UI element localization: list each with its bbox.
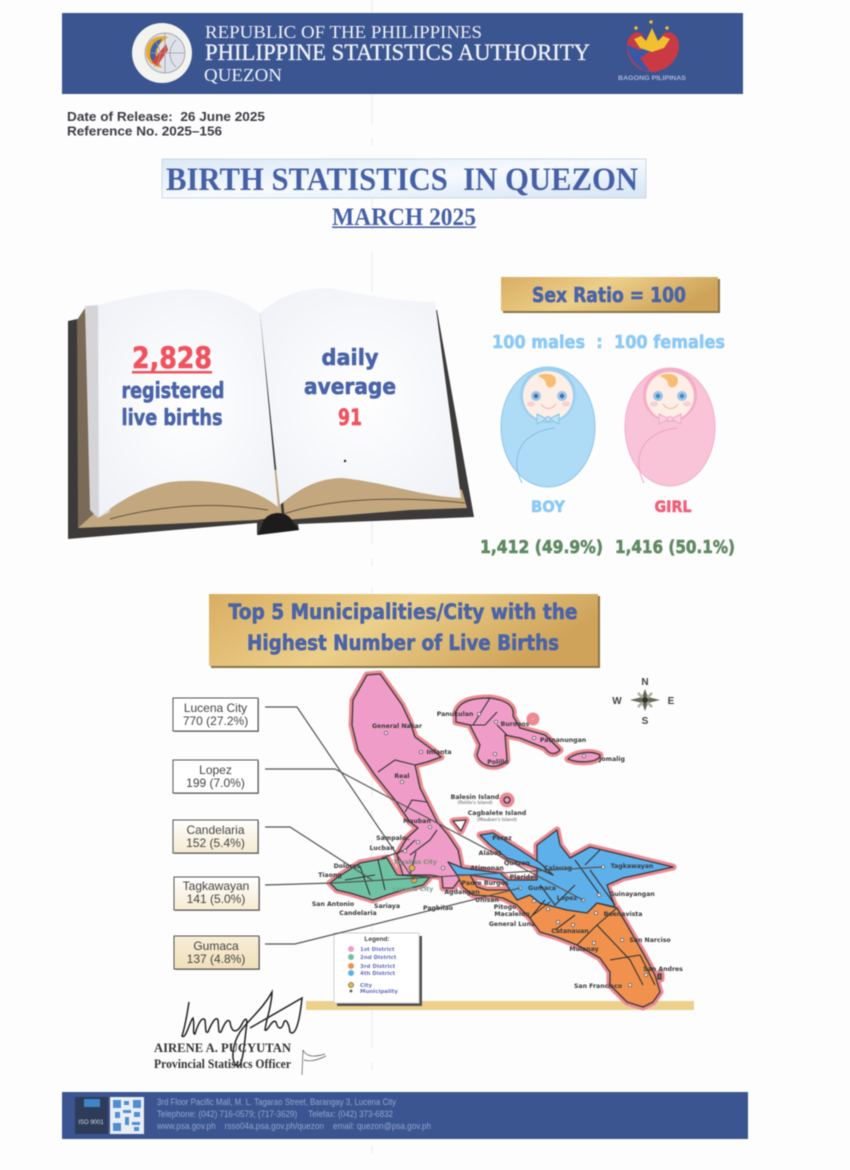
right page stats bbox=[304, 346, 396, 431]
signatory bbox=[154, 992, 326, 1075]
map place labels: south: Plaridel bbox=[510, 874, 536, 881]
signatory: AIRENE A. PUCYUTAN bbox=[154, 1040, 292, 1055]
map place labels: north: General Nakar bbox=[372, 723, 423, 730]
callout: Gumaca: 137 (4.8%) bbox=[187, 952, 245, 966]
callout: Candelaria: Candelaria bbox=[186, 823, 245, 837]
right page bbox=[260, 288, 461, 505]
map place labels: south: Gumaca bbox=[528, 885, 556, 892]
right page stats: daily bbox=[322, 346, 378, 371]
map place labels: south: Tagkawayan bbox=[611, 863, 653, 870]
sex ratio banner bbox=[501, 277, 720, 313]
icon: ISO certification badge bbox=[75, 1097, 108, 1134]
map place labels: north: Panukulan bbox=[437, 711, 473, 718]
footer band bbox=[62, 1092, 748, 1139]
map place labels: south: Pitogo bbox=[494, 904, 516, 911]
map legend: 3rd District bbox=[360, 964, 396, 970]
boy count: 1,412 (49.9%) bbox=[480, 537, 603, 558]
label: boy: BOY bbox=[531, 497, 565, 516]
map place labels: north: Polillo bbox=[487, 759, 509, 766]
header text: QUEZON bbox=[204, 65, 282, 85]
map place labels: south: Dolores bbox=[334, 863, 361, 870]
map of Quezon province bbox=[306, 674, 694, 1010]
map base: districts bbox=[330, 674, 673, 1007]
icon: compass rose: W bbox=[612, 696, 622, 707]
footer contact text bbox=[156, 1097, 431, 1131]
left page bbox=[85, 305, 110, 518]
spine bbox=[258, 513, 299, 535]
callout: Tagkawayan: 141 (5.0%) bbox=[187, 892, 245, 906]
callout: Candelaria: 152 (5.4%) bbox=[186, 836, 245, 850]
map place labels: south: Lucena City bbox=[393, 886, 433, 893]
map place labels: south: San Narciso bbox=[629, 937, 671, 944]
callout: Lopez bbox=[173, 760, 259, 794]
map place labels: south: San Francisco bbox=[574, 983, 622, 990]
callout: Lucena City: Lucena City bbox=[184, 701, 247, 715]
callout: Lopez: Lopez bbox=[199, 763, 232, 777]
icon: Bagong Pilipinas logo bbox=[618, 20, 687, 82]
map place labels: north: Mauban bbox=[403, 818, 431, 825]
header text: PHILIPPINE STATISTICS AUTHORITY bbox=[205, 40, 590, 65]
map legend bbox=[334, 933, 422, 1006]
map place labels: north: Infanta bbox=[426, 749, 452, 756]
top 5 heading: Top 5 Municipalities/City with the bbox=[228, 600, 578, 624]
map place labels: south: Lucban bbox=[369, 845, 395, 852]
release date and reference number: Reference No. 2025–156 bbox=[67, 124, 222, 138]
map place labels: south: Quezon bbox=[504, 860, 530, 867]
header text: REPUBLIC OF THE PHILIPPINES bbox=[205, 22, 482, 42]
icon: ISO certification badge: ISO 9001 bbox=[78, 1120, 104, 1126]
sex ratio banner: Sex Ratio = 100 bbox=[532, 283, 686, 307]
map place labels: south: General Luna bbox=[489, 921, 535, 928]
map place labels: south: Agdangan bbox=[444, 889, 480, 896]
icon: QR code bbox=[110, 1097, 144, 1134]
map place labels: north: Jomalig bbox=[598, 756, 625, 763]
icon: PSA seal bbox=[132, 23, 192, 83]
icon: compass rose: S bbox=[642, 716, 649, 727]
map place labels: south: Padre Burgos bbox=[462, 880, 509, 887]
map place labels: south: Guinayangan bbox=[609, 891, 655, 898]
subtitle: month: MARCH 2025 bbox=[332, 204, 476, 231]
left page stats: live births bbox=[122, 406, 222, 431]
title: BIRTH STATISTICS IN QUEZON bbox=[166, 162, 638, 198]
map place labels: south: Catanauan bbox=[551, 928, 589, 935]
map legend: Legend: bbox=[364, 936, 390, 943]
label: girl: GIRL bbox=[654, 497, 692, 516]
map place labels: north: Sampaloc bbox=[376, 835, 410, 842]
right page stats: 91 bbox=[338, 406, 362, 431]
map place labels: south: Perez bbox=[492, 835, 512, 842]
release date and reference number bbox=[67, 109, 265, 138]
map place labels: south: Pagbilao bbox=[423, 905, 453, 912]
right page stats: average bbox=[304, 375, 396, 400]
map legend: City bbox=[360, 983, 373, 989]
map place labels: south: San Andres bbox=[643, 966, 683, 973]
open book panel bbox=[68, 288, 474, 539]
map place labels: south: Alabat bbox=[479, 850, 501, 857]
signature scribble bbox=[182, 992, 302, 1066]
callout: Tagkawayan bbox=[174, 877, 260, 911]
footer contact text: 3rd Floor Pacific Mall, M. L. Tagarao Street, Barangay 3, Lucena City bbox=[157, 1097, 396, 1107]
icon: compass rose bbox=[612, 677, 675, 727]
footer contact text: Telephone: (042) 716-0579; (717-3629) Telefax: (042) 373-6832 bbox=[157, 1109, 393, 1119]
book cover bbox=[68, 310, 474, 539]
map place labels: south: San Antonio bbox=[312, 901, 354, 908]
map place labels: south: Macalelon bbox=[494, 911, 530, 918]
map place labels: north: Real bbox=[394, 773, 410, 780]
callout: Lucena City: 770 (27.2%) bbox=[183, 714, 248, 728]
map place labels: south: Tayabas City bbox=[393, 859, 437, 866]
map place labels: south: Calauag bbox=[544, 865, 572, 872]
top 5 heading: Highest Number of Live Births bbox=[247, 631, 559, 655]
ratio text: 100 males : 100 females bbox=[492, 332, 725, 353]
top 5 heading bbox=[209, 594, 600, 668]
map place labels: south: Tiaong bbox=[318, 872, 342, 879]
map place labels: north: Burdeos bbox=[501, 721, 530, 728]
header band bbox=[62, 13, 743, 94]
callout: Lucena City bbox=[173, 698, 259, 732]
map place labels: south: Buenavista bbox=[604, 911, 642, 918]
map place labels: north: (Polillo's Island) bbox=[458, 800, 493, 806]
callout: Candelaria bbox=[173, 820, 259, 854]
map place labels: north bbox=[372, 711, 625, 842]
map place labels: south: Sariaya bbox=[374, 903, 400, 910]
header text bbox=[204, 22, 590, 85]
icon: baby girl bbox=[625, 368, 715, 486]
signatory: Provincial Statistics Officer bbox=[154, 1057, 291, 1071]
icon: compass rose: N bbox=[641, 677, 649, 688]
icon: baby boy bbox=[501, 367, 595, 487]
release date and reference number: Date of Release: 26 June 2025 bbox=[67, 109, 265, 124]
left page stats bbox=[122, 341, 224, 431]
map place labels: north: Patnanungan bbox=[540, 737, 586, 744]
map place labels: north: Cagbalete Island bbox=[468, 810, 526, 817]
callout: Tagkawayan: Tagkawayan bbox=[183, 879, 249, 893]
map place labels: south: Lopez bbox=[557, 895, 578, 902]
map legend: 2nd District bbox=[360, 955, 397, 961]
map legend: 1st District bbox=[360, 947, 395, 953]
map place labels: south: Candelaria bbox=[339, 910, 377, 917]
left page stats: registered bbox=[122, 379, 224, 404]
map place labels: south: Mulanay bbox=[569, 946, 599, 953]
page block bbox=[78, 460, 282, 528]
map place labels: south: Unisan bbox=[475, 897, 499, 904]
map place labels: north: (Mauban's Island) bbox=[477, 817, 517, 823]
girl count: 1,416 (50.1%) bbox=[615, 537, 735, 558]
map legend: Municipality bbox=[360, 989, 398, 995]
left page stats: 2,828 bbox=[132, 341, 212, 375]
map place labels: south: Atimonan bbox=[470, 865, 504, 872]
callout leader lines bbox=[265, 707, 602, 944]
map legend: 4th District bbox=[360, 971, 395, 977]
callout: Lopez: 199 (7.0%) bbox=[186, 776, 245, 790]
callout: Gumaca bbox=[174, 936, 260, 970]
footer contact text: www.psa.gov.ph rsso04a.psa.gov.ph/quezon email: quezon@psa.gov.ph bbox=[156, 1121, 431, 1131]
icon: compass rose: E bbox=[668, 696, 675, 707]
map municipality markers bbox=[384, 712, 648, 987]
callout: Gumaca: Gumaca bbox=[193, 939, 239, 953]
icon: Bagong Pilipinas logo: BAGONG PILIPINAS bbox=[618, 75, 687, 82]
map place labels: south bbox=[312, 835, 683, 990]
map place labels: north: Balesin Island bbox=[451, 794, 499, 801]
